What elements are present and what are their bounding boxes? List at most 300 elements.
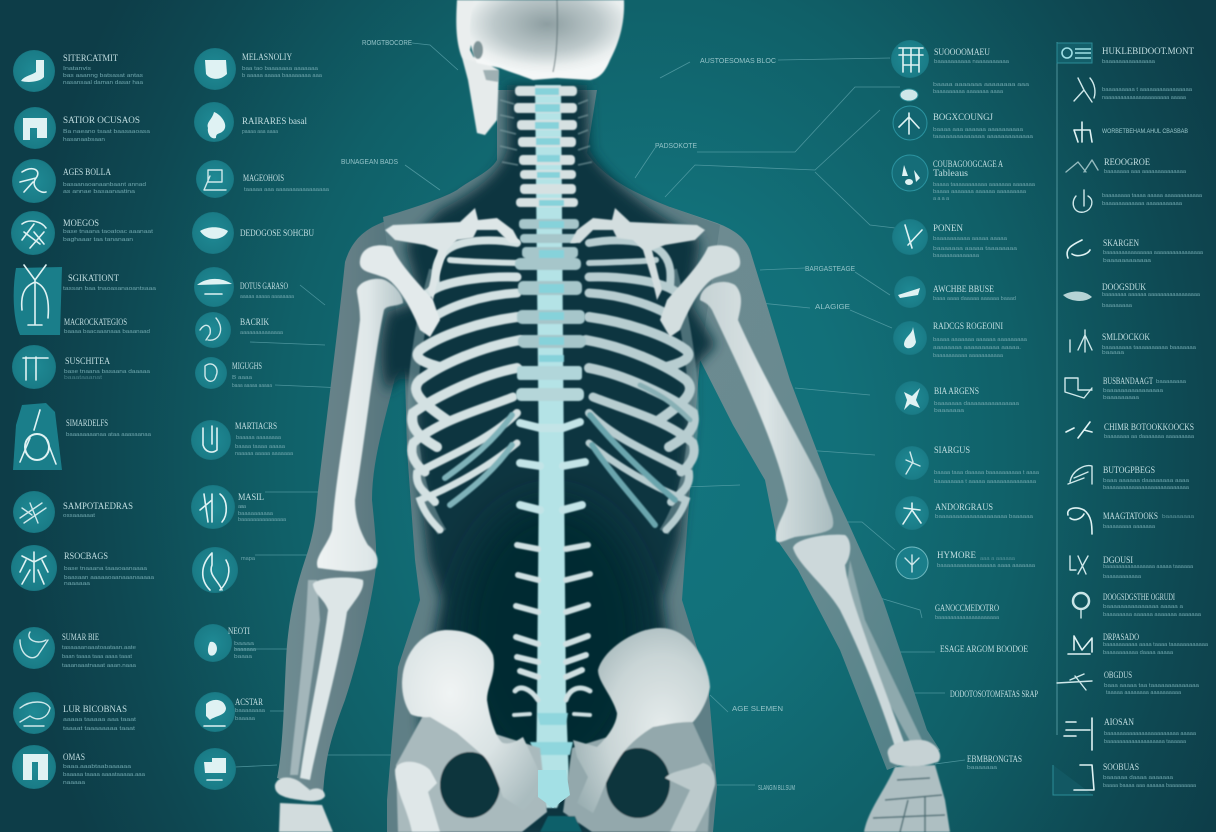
shoulder blades [360,208,740,337]
text block 12 [235,698,266,722]
left scapula [385,208,520,300]
right ulna [793,535,905,747]
text block 4: PONEN [933,224,963,234]
text block 11: baaaaaaaaaaaaaaaaaaaa [935,615,1000,621]
text block 11: baaa aaaaaa daaaaaaaa aaaa [1103,478,1190,484]
text block 11: baaaaaaaaaaaaaaaaaaaaaaaaaa [1103,485,1190,491]
text block 14: DOOGSDGSTHE OGRUDI [1103,593,1175,603]
icon: figure [895,446,929,480]
text block 12: ACSTAR [235,698,263,708]
icon: spiky bone [1074,122,1092,142]
callout shoulder: BARGASTEAGE [805,266,855,273]
text block 6: aaaaaaaa aaaaaaaaaa aaaaa. [933,345,1022,351]
text block 13: OMAS [63,753,85,763]
text block 10: base tnaaana taaaoaanaaaa [64,566,148,572]
text block 7 [64,357,151,381]
text block 6: aaaaaaaaaaaaaa [240,330,284,336]
text block 15: baaaaaaaaaa daaaa aaaaa [1103,650,1174,656]
spine [500,85,592,808]
text block 13: baaa.aaabtaabaaaaaa [63,764,132,770]
icon: skull sketch [13,692,55,734]
icon: round knot [1073,593,1089,618]
text block 13 [1103,556,1194,580]
text block 6 [933,322,1028,359]
text block 3 [933,160,1036,202]
text block 5: tassan baa tnaoasanaoantsaaa [63,286,157,292]
icon: mountains [1066,160,1098,172]
text block 3: COUBAGOOGCAGE A [933,160,1003,170]
text block 2: baaaa aaa aaaaaa aaaaaaaaaa [933,127,1024,133]
text block 10: RSOCBAGS [64,552,108,562]
icon: cross bone [1070,556,1088,574]
text block 11: tasaaaanaaatoaataan.aate [62,645,136,651]
callout top left: ROMGTBOCORE [362,40,412,47]
text block 5 [933,285,1016,302]
text block 7 [934,387,1020,414]
text block 8: baaaaaaaa taaaaaaaaaa baaaaaaa [1102,345,1197,351]
text block 2 [63,116,151,143]
labels: column four [1102,47,1209,789]
text block 6: SKARGEN [1103,239,1139,249]
text block 4: REOOGROE [1104,158,1150,168]
text block 11: NEOTI [228,627,250,637]
callout top right: AUSTOESOMAS BLOC [700,58,776,65]
left ulna [300,578,363,780]
text block 5: baaaaaaaaaaaa aaaaaaaaaaa [1102,201,1183,207]
text block 4: baghaaar taa tananaan [63,237,133,243]
text block 8 [66,419,152,438]
text block 15: DRPASADO [1103,633,1139,643]
text block 9 [935,503,1034,520]
text block 10: mapa [241,556,256,562]
right acromion [660,245,740,337]
text block 13: baaaaaaaaaaa [1103,574,1142,580]
text block 1 [242,53,323,79]
icon: screen box [1057,43,1092,63]
text block 6: baaaa aaaaaaa aaaaaa aaaaaaaaa [933,337,1028,343]
text block 15: baaaaaaaaaa aaaa taaaa taaaaaaaaaaaa [1103,642,1209,648]
text block 3: baaaa aaaaaaa aaaaaa aaaaaaaaa [933,189,1027,195]
panel: right column frame [1053,42,1098,795]
icon: rib fan [11,211,55,255]
text block 2: RAIRARES basal [242,117,307,127]
text block 17: baaaaaaaaaaaaaaaaaaa taaaaaa [1104,739,1187,745]
text block 12: baaaaaaaa [1162,514,1195,520]
text block 8: baaaaa [1102,350,1125,356]
icon: small oval [900,89,918,101]
right ilium [573,628,710,813]
text block 9: BUSBANDAAGT [1103,377,1153,387]
icon: kidney [194,48,236,90]
text block 8: MARTIACRS [235,422,277,432]
text block 12: baaaaaaaa [235,708,266,714]
text block 14 [967,755,1022,771]
icon: curve sketch [195,312,231,348]
left femur head [395,762,440,832]
text block 10: CHIMR BOTOOKKOOCKS [1104,423,1194,433]
text block 5: DOTUS GARASO [240,282,288,292]
divider [1056,42,1058,735]
icon: bird bone [893,321,927,355]
icon: crossed bones [892,219,928,255]
text block 10 [937,551,1036,569]
callout pelvis: AGE SLEMEN [732,706,783,713]
skull [456,0,624,135]
text block 1: SITERCATMIT [63,54,118,64]
icon: dragonfly [1057,674,1092,690]
text block 10: baaaaaaaaaaaaaaaaa aaaa aaaaaaa [937,563,1036,569]
right radius [845,560,922,745]
text block 12: aaaaa taaaaa aaa taaat [63,717,137,723]
text block 16 [1104,671,1200,696]
text block 12: taaaat taaaaaaaa taaat [63,726,136,732]
left hand [279,803,333,832]
text block 5: baaaaaaaa taaaa aaaaa aaaaaaaaaaaa [1102,193,1203,199]
text block 2: taaaaaaaaaaaaaa aaaaaaaaaaaaa [933,134,1034,140]
right arm silhouette [670,207,940,770]
left humerus [317,279,403,572]
panel: left column icons [11,50,62,789]
text block 2: SATIOR OCUSAOS [63,116,140,126]
icon: flame bone [1070,330,1092,352]
text block 11: baaaaaa [234,647,257,653]
thoracic vertebrae [515,219,586,401]
text block 1 [933,48,1030,95]
text block 8 [1102,333,1197,356]
text block 4 [1104,158,1187,175]
icon: hand [191,420,231,460]
text block 8: baaaaaaaanaa ataa aaasaanaa [66,432,152,438]
text block 4: MOEGOS [63,219,99,229]
icon: walking figure [895,496,929,530]
text block 11: BUTOGPBEGS [1103,466,1155,476]
text block 3: taaaaa aaa aaaaaaaaaaaaaaaa [244,187,330,193]
text block 5 [240,282,295,300]
left wrist [275,777,325,801]
text block 12: LUR BICOBNAS [63,705,127,715]
callouts: centre labels [341,40,855,792]
text block 1: baaaaaaaaaa naaaaaaaaaa [934,59,1010,65]
right lower rib strands [590,385,690,525]
text block 10: baaaaaaa aa daaaaaaa aaaaaaaaa [1104,434,1195,440]
labels: column two [228,53,330,722]
text block 11: taaanaaatnaaat aaan.naaa [62,663,137,669]
text block 18 [1103,763,1197,789]
text block 5: SGIKATIONT [68,274,119,284]
text block 12 [1103,512,1195,530]
spinal column [535,85,569,808]
icon: nerve branch [12,159,56,203]
text block 9: ossaaaaaat [63,513,96,519]
text block 1: baaaa aaaaaaa aaaaaaaa aaa [933,82,1030,88]
ribcage [412,240,694,532]
callout neck left: BUNAGEAN BADS [341,159,398,166]
text block 5: aaaaa aaaaa aaaaaaaa [240,294,295,300]
text block 6 [1103,239,1204,264]
lower abdomen shade [457,500,647,780]
text block 11: baaaa [234,654,253,660]
text block 9: baaaaaaaaa [1103,395,1140,401]
right hand [864,765,950,832]
text block 6 [64,318,150,335]
text block 1: nasansaal daman dasar haa [63,80,144,86]
text block 12: ESAGE ARGOM BOODOE [940,645,1028,655]
text block 2 [1102,87,1193,101]
text block 15 [1103,633,1209,656]
text block 2: baaaaaaaaa t aaaaaaaaaaaaaaaa [1102,87,1193,93]
text block 17: baaaaaaaaaaaaaaaaaaaaaaa aaaaa [1104,731,1197,737]
torso interior [381,85,716,832]
text block 7: BIA ARGENS [934,387,979,397]
text block 9 [63,502,133,519]
text block 5: AWCHBE BBUSE [933,285,994,295]
text block 8 [235,422,294,457]
text block 10: aaa a aaaaaa [980,556,1016,562]
right pelvic opening [606,748,670,818]
text block 16: OBGDUS [1104,671,1132,681]
icon: long bone [1064,718,1092,750]
callout arm: ALAGIGE [815,304,850,311]
text block 8: naaaaa aaaaa aaaaaaa [235,451,294,457]
text block 2 [242,117,307,135]
text block 7: SUSCHITEA [65,357,110,367]
spine cyan segments [535,88,564,362]
icon: pelvis sketch [13,627,55,669]
icon: spine curve [192,547,238,593]
text block 12: MAAGTATOOKS [1103,512,1158,522]
text block 13: DGOUSI [1103,556,1133,566]
text block 7: MIGUGHS [232,362,262,372]
cervical vertebrae [514,86,578,207]
rib side shading right [664,270,694,532]
text block 2: Ba naeano tsaat baasaaoasa [63,129,151,135]
icon: round tree [896,547,928,579]
text block 7: DOOGSDUK [1102,283,1146,293]
text block 11: GANOCCMEDOTRO [935,604,999,614]
lower vertebrae [520,422,585,510]
icon: limb bones [191,485,235,529]
right arm bones [700,282,950,832]
body silhouette [277,85,940,832]
text block 9: baaaaaaaaaaaaaaaa [1103,388,1164,394]
right pelvic ring [563,712,712,832]
text block 2: BOGXCOUNGJ [933,113,993,123]
text block 16: baaa aaaaa taa taaaaaaaaaaaaaa [1104,683,1200,689]
text block 9 [238,493,287,523]
text block 3: as annae basaanaatina [63,189,136,195]
text block 9: aaa [238,504,247,510]
text block 7: baaaaaaa daaaaaaaaaaaaaaa [934,401,1020,407]
text block 10 [1104,423,1195,440]
leader lines [235,43,965,785]
icon: star joint [895,381,929,415]
text block 18: baaaa baaaa aaa aaaaaa baaaaaaaaa [1103,783,1197,789]
text block 8: SMLDOCKOK [1102,333,1150,343]
left radius [290,580,320,775]
text block 8: SIMARDELFS [66,419,108,429]
text block 10: baasaan aaaaaoaanaaanaaaaa [64,575,155,581]
sacrum block [530,713,573,808]
text block 11 [62,633,137,669]
icon: torso sketch [893,106,927,140]
text block 6 [240,318,284,336]
text block 2 [933,113,1034,140]
text block 4: base tnaana taoatoac aaanaat [63,229,154,235]
skull back bone [456,0,480,62]
icon: organ [194,624,232,662]
text block 5: baaa aaaa daaaaa aaaaaa baaad [933,296,1016,302]
text block 3: Tableaus [933,169,968,179]
callout hip: SLANGIN BLLSUM [758,785,795,792]
icon: thorax panel [14,265,62,335]
rib side shading left [412,270,442,532]
text block 8: baaaaa aaaaaaaa [236,435,282,441]
labels: column one [62,54,157,786]
icon: disc [192,212,234,254]
text block 7: baaaaaaaa [1102,303,1133,309]
text block 1: HUKLEBIDOOT.MONT [1102,47,1194,57]
text block 13 [63,753,146,786]
text block 4 [933,224,1018,259]
text block 10: naaaaaa [64,581,91,587]
text block 4: baaaaaaaaaaaaa [933,253,980,259]
text block 7 [232,362,273,389]
text block 16: taaaaa aaaaaaaa aaaaaaaaaa [1106,690,1182,696]
neck side strands [500,100,592,165]
text block 17: AIOSAN [1104,718,1134,728]
text block 11 [935,604,1000,621]
text block 17 [1104,718,1197,745]
icon: organ [194,102,234,142]
text block 2: naaaaaaaaaaaaaaaaaaaaa aaaaa [1102,95,1187,101]
eye socket [473,41,483,59]
text block 6: RADCGS ROGEOINI [933,322,1003,332]
text block 5 [1102,193,1203,207]
text block 4: baaaaaaa aaaaa taaaaaaaa [933,246,1018,252]
text block 6: baaaaaaaaaaaa [1103,258,1152,264]
pelvis [395,628,715,832]
jaw [460,50,499,135]
text block 1: baaaaaaaaa aaaaaaa aaaa [933,89,1004,95]
text block 3: aaaa [933,196,950,202]
left pelvic opening [440,752,500,818]
text block 8 [934,446,1040,485]
text block 11 [228,627,257,660]
text block 14: EBMBRONGTAS [967,755,1022,765]
text block 18: SOOBUAS [1103,763,1139,773]
icon: organs [892,155,928,191]
text block 3 [63,168,146,195]
callout neck right: PADSOKOTE [655,143,697,150]
text block 7 [1102,283,1201,309]
text block 7: baaa aaaaa aaaaa [232,383,273,389]
icon: boot box [1053,765,1094,795]
text block 13: DODOTOSOTOMFATAS SRAP [950,690,1038,700]
icon: bracket bones [12,345,56,389]
text block 1: SUOOOOMAEU [934,48,990,58]
text block 1 [1102,47,1194,65]
text block 13: naaaaa [63,780,86,786]
text block 3: MAGEOHOIS [243,174,284,184]
left acromion [360,245,440,337]
text block 7: base tnaana basaana daaaaa [64,369,151,375]
text block 1: b aaaaa aaaaa baaaaaaaa aaa [242,73,323,79]
icon: fish bone [894,276,926,308]
right femur head [665,763,715,832]
text block 4: baaaaaaa aaa aaaaaaaaaaaaaa [1104,169,1187,175]
left ribs [412,240,520,530]
text block 2: paaaa aaa aaaa [242,129,279,135]
text block 1: Inatanvis [63,66,91,72]
text block 11: SUMAR BIE [62,633,99,643]
panel: second column icons [191,48,238,790]
text block 9: ANDORGRAUS [935,503,993,513]
text block 4 [63,219,154,243]
right humerus [700,282,833,542]
text block 9: SAMPOTAEDRAS [63,502,133,512]
text block 8: baaaa taaa daaaaa baaaaaaaaaa t aaaa [934,470,1040,476]
text block 9: baaaaaaaa [1156,379,1187,385]
left arm bones [275,279,403,832]
text block 8: baaaaaaaa t aaaaa aaaaaaaaaaaaaaa [934,479,1037,485]
text block 11 [1103,466,1190,491]
text block 7: B aaaa [232,375,253,381]
text block 14: baaaaaaaa aaaaaa aaaaaaa aaaaaaa [1103,612,1202,618]
text block 3: WORBETBEHAM.AHUL CBASBAB [1102,128,1188,135]
icon: joint [14,107,56,149]
icon: fish bone [1063,291,1092,301]
text block 9: baaaaaaaaaaaaaaaaaaaa baaaaaa [935,514,1034,520]
text block 12: baaaaaaaa aaaaaaa [1103,524,1156,530]
text block 12: baaaaa [235,716,256,722]
text block 18: baaaaaa daaaa aaaaaaa [1103,775,1174,781]
icon: forearm sketch [13,491,55,533]
text block 1: baaaaaaaaaaaaaaa [1102,59,1156,65]
text block 6: BACRIK [240,318,269,328]
text block 1: baa tao baaaaaaa aaaaaaa [242,66,319,72]
left pelvic ring [396,712,547,832]
icon: saddle [1068,636,1092,654]
text block 13: baaaaa taaaa aaaataaaaa.aaa [63,772,146,778]
icon: shoulder [1074,78,1095,102]
left ilium [402,630,540,810]
text block 6: baaaaaaaaaaaaaaa aaaaaaaaaaaaaaaa [1103,250,1204,256]
icon: bracket bone [1065,378,1092,398]
text block 3 [243,174,330,193]
text block 3: basaanaoanaanbaant annad [63,182,146,188]
text block 11: baaaa [234,641,255,647]
icon: chart sketch [196,160,234,198]
left lower rib strands [445,415,512,505]
text block 14 [1103,593,1202,618]
icon: foot [13,50,55,92]
right wrist [888,740,940,766]
text block 3: AGES BOLLA [63,168,111,178]
text block 9: MASIL [238,493,264,503]
text block 7: baaaaaaa [934,408,965,414]
text block 6: baaaaaaaaaa aaaaaaaaaaa [933,353,1004,359]
icon: skull sketch [195,357,227,389]
text block 14: baaaaaaaaaaaaaaa aaaaa a [1103,604,1184,610]
icon: flat bone [194,267,234,307]
text block 6: baaaa baacaaanaaa baaanaad [64,329,150,335]
cranium [470,0,624,80]
text block 12 [63,705,137,732]
text block 7: baaaaaaa aaaaaa aaaaaaaaaaaaaaaaa [1102,292,1201,298]
text block 1: bas aaanng batsasat antas [63,73,143,79]
text block 4: DEDOGOSE SOHCBU [240,229,314,239]
icon: joint block [194,748,236,790]
